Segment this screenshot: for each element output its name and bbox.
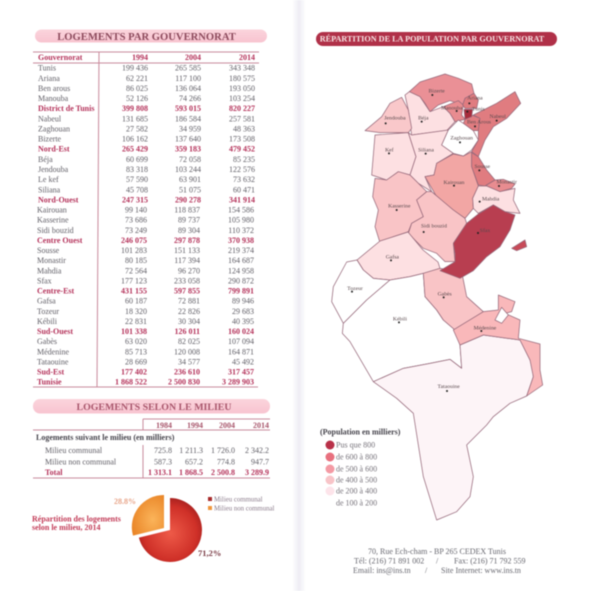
panel: logements selon le milieu xyxy=(32,399,275,562)
table: logements par gouvernorat: 89 946 xyxy=(232,297,254,306)
table: logements par gouvernorat: 124 958 xyxy=(228,266,254,275)
map: south governorates xyxy=(332,232,543,520)
table: logements selon le milieu: Total xyxy=(45,468,63,477)
panel: répartition de la population xyxy=(316,32,557,575)
table: logements par gouvernorat: 117 394 xyxy=(174,256,200,265)
table: logements par gouvernorat: 28 669 xyxy=(125,358,147,366)
map labels: north: Nabeul xyxy=(489,114,506,120)
contact footer: Fax: (216) 71 792 559 xyxy=(454,556,526,566)
map legend xyxy=(320,428,401,508)
table: logements par gouvernorat: 177 123 xyxy=(121,276,147,285)
table: logements par gouvernorat: 193 050 xyxy=(229,84,255,93)
table: logements par gouvernorat: 1994 xyxy=(132,53,148,62)
table: logements par gouvernorat: 177 402 xyxy=(121,368,147,377)
map labels: north: Kairouan xyxy=(443,180,465,186)
table: logements par gouvernorat: Siliana xyxy=(38,185,61,194)
table: logements par gouvernorat: 73 632 xyxy=(233,175,255,184)
table: logements par gouvernorat: 105 980 xyxy=(228,216,254,225)
contact footer xyxy=(353,547,526,575)
table: logements par gouvernorat: 80 185 xyxy=(125,256,147,265)
table: logements selon le milieu: Milieu non communal xyxy=(45,458,117,466)
table: logements par gouvernorat: Mahdia xyxy=(37,266,62,275)
table: logements selon le milieu: 657.2 xyxy=(185,458,203,466)
table: logements par gouvernorat: 51 075 xyxy=(179,185,201,194)
table: logements par gouvernorat: 99 140 xyxy=(125,206,147,214)
table: logements par gouvernorat: 118 837 xyxy=(174,206,200,214)
heading pill: répartition de la population xyxy=(316,32,557,46)
table: logements par gouvernorat: 117 100 xyxy=(175,74,201,83)
table: logements par gouvernorat: 22 831 xyxy=(125,317,147,326)
map labels: north: Sousse xyxy=(474,164,491,170)
table: logements selon le milieu: 774.8 xyxy=(217,458,235,466)
table: logements par gouvernorat: 83 318 xyxy=(126,165,148,174)
table: logements par gouvernorat: 131 685 xyxy=(122,114,148,123)
table: logements par gouvernorat: 63 020 xyxy=(125,337,147,346)
table: logements par gouvernorat: Tataouine xyxy=(37,358,69,366)
table: logements par gouvernorat: 479 452 xyxy=(229,145,255,154)
heading pill: logements selon le milieu xyxy=(33,399,270,414)
table: logements selon le milieu: 587.3 xyxy=(154,458,172,466)
table: logements par gouvernorat: Nord-Est xyxy=(38,145,70,154)
table: logements par gouvernorat: 48 363 xyxy=(233,124,255,134)
pie caption xyxy=(32,514,121,532)
map legend: Pus que 800 xyxy=(336,440,375,450)
table: logements par gouvernorat: 186 584 xyxy=(175,114,201,123)
table: logements par gouvernorat: 219 374 xyxy=(228,246,254,255)
table: logements par gouvernorat: 74 266 xyxy=(179,94,201,103)
table: logements par gouvernorat: 2014 xyxy=(239,53,255,62)
table: logements par gouvernorat: 103 254 xyxy=(229,94,255,103)
table: logements par gouvernorat: 233 058 xyxy=(174,276,200,285)
map labels: north: Kasserine xyxy=(388,204,411,210)
table: logements par gouvernorat: 164 687 xyxy=(228,256,254,265)
map labels: north: Gafsa xyxy=(386,254,399,261)
map labels: south: Gabès xyxy=(438,291,452,297)
table: logements par gouvernorat: 82 025 xyxy=(178,337,200,346)
table: logements par gouvernorat: 86 025 xyxy=(126,84,148,93)
table: logements par gouvernorat: 60 699 xyxy=(126,155,148,164)
table: logements par gouvernorat: 107 094 xyxy=(228,337,254,346)
pie legend: Milieu communal xyxy=(214,496,263,504)
table: logements par gouvernorat: Kasserine xyxy=(37,216,69,225)
table: logements par gouvernorat: 45 708 xyxy=(126,185,148,194)
map labels: south: Tozeur xyxy=(347,286,363,292)
table: logements par gouvernorat: 120 008 xyxy=(174,347,200,356)
table: logements par gouvernorat: Ben arous xyxy=(38,84,70,93)
pie chart: répartition des logements xyxy=(114,495,221,562)
table: logements par gouvernorat: 265 585 xyxy=(175,64,201,73)
table: logements par gouvernorat: Bizerte xyxy=(38,135,62,144)
table: logements selon le milieu: 1984 xyxy=(156,421,172,430)
map labels: north: Béja xyxy=(418,116,429,122)
table: logements par gouvernorat: 22 826 xyxy=(178,307,200,316)
map labels: north: Jendouba xyxy=(384,115,406,121)
table: logements par gouvernorat: 57 590 xyxy=(126,175,148,184)
table: logements par gouvernorat: Zaghouan xyxy=(38,124,70,134)
table: logements par gouvernorat: Sfax xyxy=(37,276,52,285)
panel: logements par gouvernorat xyxy=(33,30,267,387)
table: logements par gouvernorat: Tunisie xyxy=(37,378,62,387)
map legend: (Population en milliers) xyxy=(320,428,401,436)
table: logements par gouvernorat: 137 640 xyxy=(175,135,201,144)
table: logements par gouvernorat: 341 914 xyxy=(229,195,255,204)
table: logements par gouvernorat: Tozeur xyxy=(37,307,59,316)
map labels: north: Zaghouan xyxy=(450,136,473,142)
table: logements selon le milieu: 1 726.0 xyxy=(211,446,235,455)
map labels: south: Médenine xyxy=(474,325,497,331)
table: logements selon le milieu: 1 211.3 xyxy=(179,446,203,455)
map labels: north: Ariana xyxy=(467,96,483,102)
table: logements par gouvernorat: Nabeul xyxy=(38,114,62,123)
map labels: south xyxy=(347,286,497,392)
table: logements selon le milieu: 1 313.1 xyxy=(148,468,172,477)
table: logements par gouvernorat: Médenine xyxy=(37,347,69,356)
heading pill: répartition de la population: RÉPARTITION DE LA POPULATION PAR GOUVERNORAT xyxy=(320,34,545,44)
map labels: north: Bizerte xyxy=(428,89,445,95)
table: logements par gouvernorat: 89 737 xyxy=(178,216,200,225)
table: logements par gouvernorat: 103 244 xyxy=(175,165,201,174)
heading pill: logements selon le milieu: LOGEMENTS SELON LE MILIEU xyxy=(76,402,232,413)
contact footer: Email: ins@ins.tn xyxy=(353,566,411,575)
table: logements selon le milieu: 3 289.9 xyxy=(245,468,269,477)
table: logements par gouvernorat: 297 878 xyxy=(174,236,200,245)
table: logements par gouvernorat: Sidi bouzid xyxy=(37,226,74,235)
table: logements par gouvernorat: 52 126 xyxy=(126,94,148,103)
table: logements par gouvernorat: Ariana xyxy=(38,74,60,83)
table: logements par gouvernorat: 63 901 xyxy=(179,175,201,184)
table: logements par gouvernorat: Sousse xyxy=(37,246,60,255)
table: logements par gouvernorat: 18 320 xyxy=(125,307,147,316)
map labels: north: Ben Arous xyxy=(467,119,491,125)
map labels: north xyxy=(384,89,517,261)
contact footer: / xyxy=(436,556,439,566)
table: logements par gouvernorat: Centre-Est xyxy=(37,287,75,296)
pie caption: selon le milieu, 2014 xyxy=(32,523,100,532)
table: logements par gouvernorat: 265 429 xyxy=(122,145,148,154)
table: logements par gouvernorat: 122 576 xyxy=(229,165,255,174)
table: logements par gouvernorat: 27 582 xyxy=(126,124,148,134)
table: logements par gouvernorat: 399 808 xyxy=(122,104,148,113)
table: logements selon le milieu: 947.7 xyxy=(251,458,269,466)
table: logements par gouvernorat: 29 683 xyxy=(232,307,254,316)
table: logements par gouvernorat: Gouvernorat xyxy=(38,53,83,62)
table: logements par gouvernorat: 593 015 xyxy=(175,104,201,113)
table: logements par gouvernorat: 359 183 xyxy=(175,145,201,154)
table: logements par gouvernorat: 45 492 xyxy=(232,358,254,366)
map labels: north: Sidi bouzid xyxy=(421,223,447,229)
table: logements par gouvernorat: 73 249 xyxy=(125,226,147,235)
table: logements par gouvernorat: 110 372 xyxy=(228,226,254,235)
table: logements par gouvernorat: Tunis xyxy=(38,64,56,73)
table: logements par gouvernorat: 89 304 xyxy=(178,226,200,235)
map labels: north: Monastir xyxy=(496,180,517,186)
map: north governorates xyxy=(365,74,527,262)
pie chart: répartition des logements: 71,2% xyxy=(198,548,221,558)
map labels: north: Siliana xyxy=(418,147,434,153)
contact footer: Site Internet: www.ins.tn xyxy=(441,566,521,575)
table: logements par gouvernorat: 431 155 xyxy=(121,287,147,296)
table: logements par gouvernorat: Béja xyxy=(38,155,53,164)
heading pill: logements par gouvernorat xyxy=(35,30,267,43)
table: logements par gouvernorat: 3 289 903 xyxy=(222,378,254,387)
table: logements par gouvernorat: 2 500 830 xyxy=(168,378,200,387)
table: logements par gouvernorat: Sud-Ouest xyxy=(37,327,73,336)
map labels: north: Kef xyxy=(385,146,394,153)
table: logements par gouvernorat: 290 872 xyxy=(228,276,254,285)
map legend: de 500 à 600 xyxy=(336,464,377,474)
table: logements selon le milieu: 725.8 xyxy=(154,446,172,455)
map: Sfax governorate xyxy=(440,205,515,278)
table: logements par gouvernorat: 199 436 xyxy=(122,64,148,73)
table: logements par gouvernorat: Kairouan xyxy=(37,206,67,214)
table: logements par gouvernorat: 85 713 xyxy=(125,347,147,356)
table: logements par gouvernorat: 136 064 xyxy=(175,84,201,93)
table: logements par gouvernorat xyxy=(33,52,259,387)
table: logements par gouvernorat: Nord-Ouest xyxy=(38,195,79,204)
table: logements par gouvernorat: 73 686 xyxy=(125,216,147,225)
table: logements par gouvernorat: 2004 xyxy=(185,53,201,62)
table: logements par gouvernorat: 106 162 xyxy=(122,135,148,144)
pie caption: Répartition des logements xyxy=(32,514,121,524)
table: logements par gouvernorat: Gafsa xyxy=(37,297,56,306)
map labels: south: Tataouine xyxy=(438,384,460,390)
table: logements selon le milieu: 2014 xyxy=(253,421,269,430)
table: logements par gouvernorat: 60 471 xyxy=(233,185,255,194)
pie chart: répartition des logements: 28.8% xyxy=(114,497,136,506)
table: logements selon le milieu: 2004 xyxy=(219,421,235,430)
table: logements par gouvernorat: 62 221 xyxy=(126,74,148,83)
table: logements par gouvernorat: 72 564 xyxy=(125,266,147,275)
table: logements par gouvernorat: 34 959 xyxy=(179,124,201,134)
table: logements selon le milieu xyxy=(33,419,270,478)
table: logements par gouvernorat: 290 278 xyxy=(175,195,201,204)
table: logements par gouvernorat: Kébili xyxy=(37,317,58,326)
table: logements par gouvernorat: 34 577 xyxy=(178,358,200,366)
table: logements par gouvernorat: Centre Ouest xyxy=(37,236,83,245)
table: logements par gouvernorat: 160 024 xyxy=(228,327,254,336)
table: logements par gouvernorat: 72 881 xyxy=(178,297,200,306)
table: logements par gouvernorat: 180 575 xyxy=(229,74,255,83)
map labels: north: Sfax xyxy=(480,227,490,234)
table: logements par gouvernorat: 72 058 xyxy=(179,155,201,164)
pie legend: Milieu non communal xyxy=(214,506,275,512)
page fold xyxy=(292,0,306,591)
table: logements par gouvernorat: 85 235 xyxy=(233,155,255,164)
map labels: north: Mahdia xyxy=(482,197,500,203)
table: logements selon le milieu: 2 342.2 xyxy=(245,446,269,455)
table: logements selon le milieu: 1 868.5 xyxy=(179,468,203,477)
contact footer: 70, Rue Ech-cham - BP 265 CEDEX Tunis xyxy=(368,547,506,556)
table: logements selon le milieu: 2 500.8 xyxy=(211,468,235,477)
contact footer: Tél: (216) 71 891 002 xyxy=(354,556,424,566)
table: logements par gouvernorat: 317 457 xyxy=(228,368,254,377)
table: logements par gouvernorat: 101 283 xyxy=(121,246,147,255)
table: logements par gouvernorat: Manouba xyxy=(38,94,69,103)
table: logements par gouvernorat: 154 586 xyxy=(228,206,254,214)
table: logements par gouvernorat: 343 348 xyxy=(229,64,255,73)
table: logements par gouvernorat: 126 011 xyxy=(174,327,200,336)
table: logements par gouvernorat: 30 304 xyxy=(178,317,200,326)
table: logements par gouvernorat: 247 315 xyxy=(122,195,148,204)
table: logements par gouvernorat: 101 338 xyxy=(121,327,147,336)
table: logements par gouvernorat: District de Tunis xyxy=(38,104,94,113)
map labels: north: Tunis xyxy=(472,106,485,112)
table: logements selon le milieu: 1994 xyxy=(187,421,203,430)
table: logements par gouvernorat: 60 187 xyxy=(125,297,147,306)
table: logements par gouvernorat: 236 610 xyxy=(174,368,200,377)
map legend: de 400 à 500 xyxy=(336,476,377,484)
map labels: north: Manouba xyxy=(441,106,463,112)
table: logements par gouvernorat: Sud-Est xyxy=(37,368,64,377)
table: logements par gouvernorat: 257 581 xyxy=(229,114,255,123)
table: logements par gouvernorat: 173 508 xyxy=(229,135,255,144)
table: logements par gouvernorat: Jendouba xyxy=(38,165,69,174)
table: logements par gouvernorat: 96 270 xyxy=(178,266,200,275)
heading pill: logements par gouvernorat: LOGEMENTS PAR GOUVERNORAT xyxy=(57,32,236,43)
table: logements par gouvernorat: 597 855 xyxy=(174,287,200,296)
table: logements selon le milieu: Milieu communal xyxy=(45,446,103,455)
table: logements par gouvernorat: Monastir xyxy=(37,256,66,265)
table: logements par gouvernorat: 370 938 xyxy=(228,236,254,245)
table: logements selon le milieu: Logements suivant le milieu (en milliers) xyxy=(36,433,175,442)
table: logements par gouvernorat: Le kef xyxy=(38,175,59,184)
table: logements par gouvernorat: 164 871 xyxy=(228,347,254,356)
table: logements par gouvernorat: 799 891 xyxy=(228,287,254,296)
table: logements par gouvernorat: 820 227 xyxy=(229,104,255,113)
table: logements par gouvernorat: 1 868 522 xyxy=(115,378,147,387)
table: logements par gouvernorat: 40 395 xyxy=(232,317,254,326)
table: logements par gouvernorat: 151 133 xyxy=(174,246,200,255)
map legend: de 100 à 200 xyxy=(336,498,377,508)
pie legend xyxy=(208,496,275,512)
table: logements par gouvernorat: Gabès xyxy=(37,337,57,346)
map labels: south: Kébili xyxy=(393,316,407,322)
map legend: de 200 à 400 xyxy=(336,486,377,496)
table: logements par gouvernorat: 246 075 xyxy=(121,236,147,245)
map legend: de 600 à 800 xyxy=(336,452,377,462)
contact footer: / xyxy=(425,566,428,575)
